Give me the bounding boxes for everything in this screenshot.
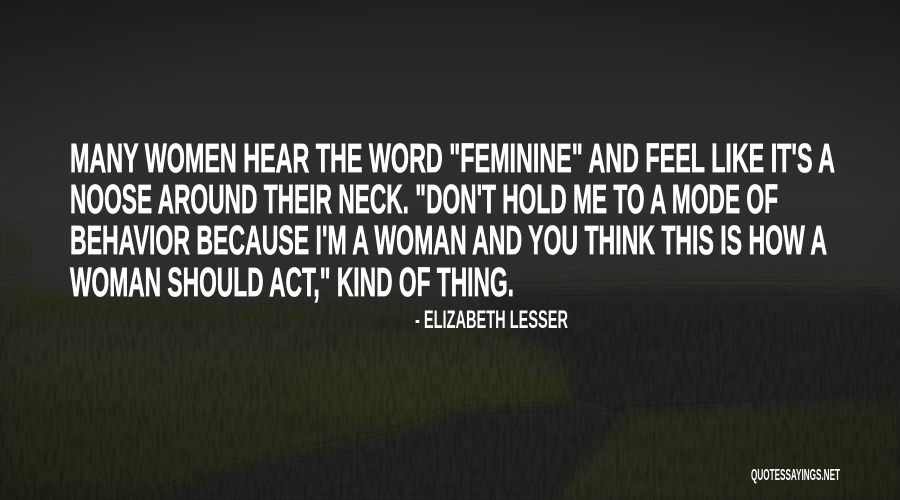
landscape: distant green band [530,268,900,296]
quote text [70,135,835,305]
landscape: dark bushes on right [470,288,900,412]
landscape: bright patch of field [290,345,550,425]
landscape: left olive field [0,284,572,500]
landscape: left tree [0,228,32,272]
landscape: dark mound [150,405,625,500]
quote text: WOMAN SHOULD ACT," KIND OF THING. [70,259,514,305]
landscape: grass texture [0,320,900,500]
landscape: right grass [555,398,900,500]
attribution: - ELIZABETH LESSER [415,306,568,334]
